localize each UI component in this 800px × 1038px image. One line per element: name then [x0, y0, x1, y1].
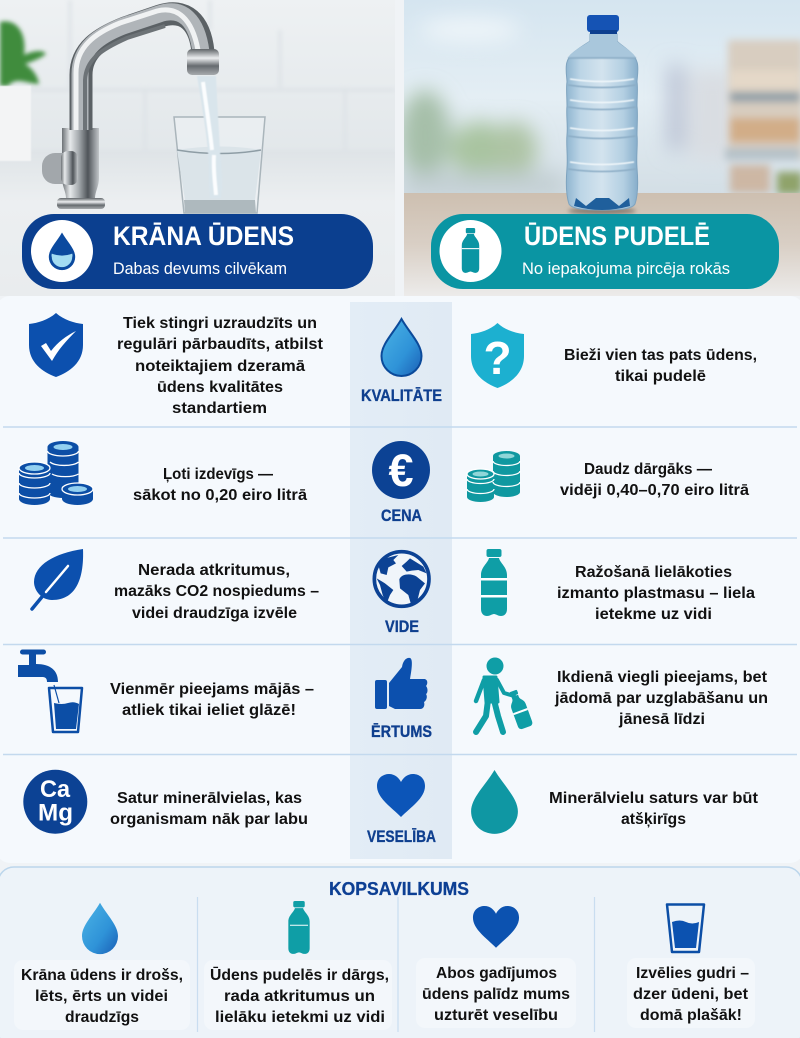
- text: tap water convenience: Vienmēr pieejams mājās –: [110, 681, 314, 698]
- text: bottled water convenience: jānesā līdzi: [618, 711, 705, 728]
- text: Ūdens pudelēs ir dārgs,: [210, 965, 389, 984]
- text: Abos gadījumos: [436, 965, 557, 982]
- icon: drop: [82, 903, 118, 954]
- icon: globe: [374, 552, 429, 607]
- text: lēts, ērts un videi: [35, 988, 168, 1005]
- text: tap water quality: Tiek stingri uzraudzīts un: [123, 315, 317, 332]
- row: kvalitāte: [29, 313, 757, 417]
- icon: Ca Mg minerals: Ca: [40, 776, 71, 803]
- text: Krāna ūdens ir drošs,: [21, 967, 183, 984]
- icon: centre water drop: [382, 319, 422, 376]
- text: tap water convenience: atliek tikai ieliet glāzē!: [122, 702, 296, 719]
- text: [21, 967, 183, 1026]
- row: cena: [19, 441, 749, 525]
- icon: bottle: [288, 901, 310, 954]
- text: bottled water quality: [564, 347, 757, 385]
- heading: bottled water: ŪDENS PUDELĒ: [524, 221, 710, 251]
- icon: leaf: [32, 549, 83, 609]
- text: bottled water convenience: Ikdienā viegli pieejams, bet: [557, 669, 768, 686]
- icon: heart: [473, 906, 519, 948]
- text: tap water quality: noteiktajiem dzeramā: [135, 358, 305, 375]
- icon: teal coin stacks: [467, 451, 520, 502]
- text: tap water price: [133, 466, 307, 504]
- text: bottled water health: [549, 790, 759, 828]
- text: bottled water environment: ietekme uz vidi: [595, 606, 712, 623]
- text: bottled water convenience: [554, 669, 768, 728]
- text: tap water environment: videi draudzīga izvēle: [132, 605, 297, 622]
- banner: bottled water: [431, 214, 779, 289]
- row: vide: [32, 549, 755, 636]
- icon: glass of water: [667, 904, 704, 952]
- text: Izvēlies gudri –: [636, 965, 749, 982]
- faucet: [42, 10, 219, 209]
- text: tap water quality: regulāri pārbaudīts, atbilst: [117, 336, 324, 353]
- icon: Ca Mg minerals: [23, 770, 87, 834]
- plant: [0, 21, 46, 161]
- icon: heart: [377, 774, 425, 817]
- text: draudzīgs: [65, 1009, 139, 1026]
- summary item: bottled water: [210, 901, 389, 1026]
- text: bottled water price: vidēji 0,40–0,70 eiro litrā: [560, 482, 749, 499]
- summary item: health: [422, 906, 570, 1024]
- text: bottled water health: Minerālvielu saturs var būt: [549, 790, 759, 807]
- icon: euro circle: [372, 441, 430, 499]
- text: tap water environment: [114, 562, 319, 622]
- icon: Ca Mg minerals: Mg: [38, 800, 73, 826]
- text: domā plašāk!: [640, 1007, 742, 1024]
- icon: shield with check: [29, 313, 83, 377]
- text: dzer ūdeni, bet: [633, 986, 749, 1003]
- text: tap water health: Satur minerālvielas, kas: [117, 790, 302, 807]
- text: bottled water environment: Ražošanā lielākoties: [575, 564, 732, 581]
- icon: water drop in circle: [31, 220, 93, 282]
- heading: summary: KOPSAVILKUMS: [329, 878, 469, 899]
- subheading: bottled water: No iepakojuma pircēja rokās: [522, 259, 730, 278]
- text: tap water price: Ļoti izdevīgs —: [163, 466, 273, 483]
- icon: euro circle: €: [388, 445, 414, 496]
- row: ērtums: [18, 650, 768, 741]
- icon: bottle in circle: [440, 220, 502, 282]
- subheading: tap water: Dabas devums cilvēkam: [113, 259, 287, 278]
- glass: [174, 117, 265, 213]
- icon: teal bottle: [481, 549, 507, 616]
- banner: tap water: [22, 214, 373, 289]
- label: cena: CENA: [381, 506, 422, 525]
- text: tap water quality: ūdens kvalitātes: [157, 379, 283, 396]
- icon: shield with question mark: ?: [483, 332, 512, 384]
- label: vide: VIDE: [385, 617, 419, 636]
- text: bottled water environment: [557, 564, 755, 623]
- text: tap water quality: [117, 315, 324, 417]
- text: tap water health: [110, 790, 308, 828]
- text: bottled water quality: tikai pudelē: [615, 368, 706, 385]
- text: tap water price: sākot no 0,20 eiro litrā: [133, 487, 307, 504]
- icon: thumbs up: [375, 658, 428, 709]
- text: tap water convenience: [110, 681, 314, 719]
- icon: tap and glass: [18, 650, 82, 732]
- panel: tap water photo: [0, 2, 395, 214]
- label: ērtums: ĒRTUMS: [371, 722, 432, 741]
- summary item: choose wisely: [633, 904, 749, 1024]
- text: bottled water quality: Bieži vien tas pats ūdens,: [564, 347, 757, 364]
- label: kvalitāte: KVALITĀTE: [361, 386, 442, 405]
- text: uzturēt veselību: [434, 1007, 558, 1024]
- text: [633, 965, 749, 1024]
- text: ūdens palīdz mums: [422, 986, 570, 1003]
- text: bottled water environment: izmanto plastmasu – liela: [557, 585, 755, 602]
- icon: teal drop: [471, 770, 518, 834]
- panel: summary: [0, 867, 800, 1038]
- text: [422, 965, 570, 1024]
- icon: blue coin stacks: [19, 441, 93, 505]
- text: bottled water health: atšķirīgs: [621, 811, 686, 828]
- text: [210, 965, 389, 1026]
- icon: shield with question mark: [471, 323, 524, 388]
- text: rada atkritumus un: [224, 988, 375, 1005]
- row: veselība: [23, 770, 759, 846]
- text: tap water health: organismam nāk par labu: [110, 811, 308, 828]
- icon: person carrying bottle: [476, 658, 533, 732]
- text: bottled water price: Daudz dārgāks —: [584, 461, 712, 478]
- water stream: [197, 76, 222, 198]
- text: bottled water convenience: jādomā par uzglabāšanu un: [554, 690, 768, 707]
- text: tap water environment: mazāks CO2 nospiedums –: [114, 583, 319, 600]
- text: lielāku ietekmi uz vidi: [215, 1009, 385, 1026]
- heading: tap water: KRĀNA ŪDENS: [113, 221, 294, 251]
- text: tap water quality: standartiem: [172, 400, 267, 417]
- text: tap water environment: Nerada atkritumus,: [138, 562, 290, 579]
- panel: comparison table: [0, 296, 800, 863]
- label: veselība: VESELĪBA: [367, 827, 436, 846]
- bottle: [566, 15, 638, 210]
- panel: bottled water photo: [400, 0, 800, 296]
- text: bottled water price: [560, 461, 749, 499]
- summary item: tap water: [21, 903, 183, 1026]
